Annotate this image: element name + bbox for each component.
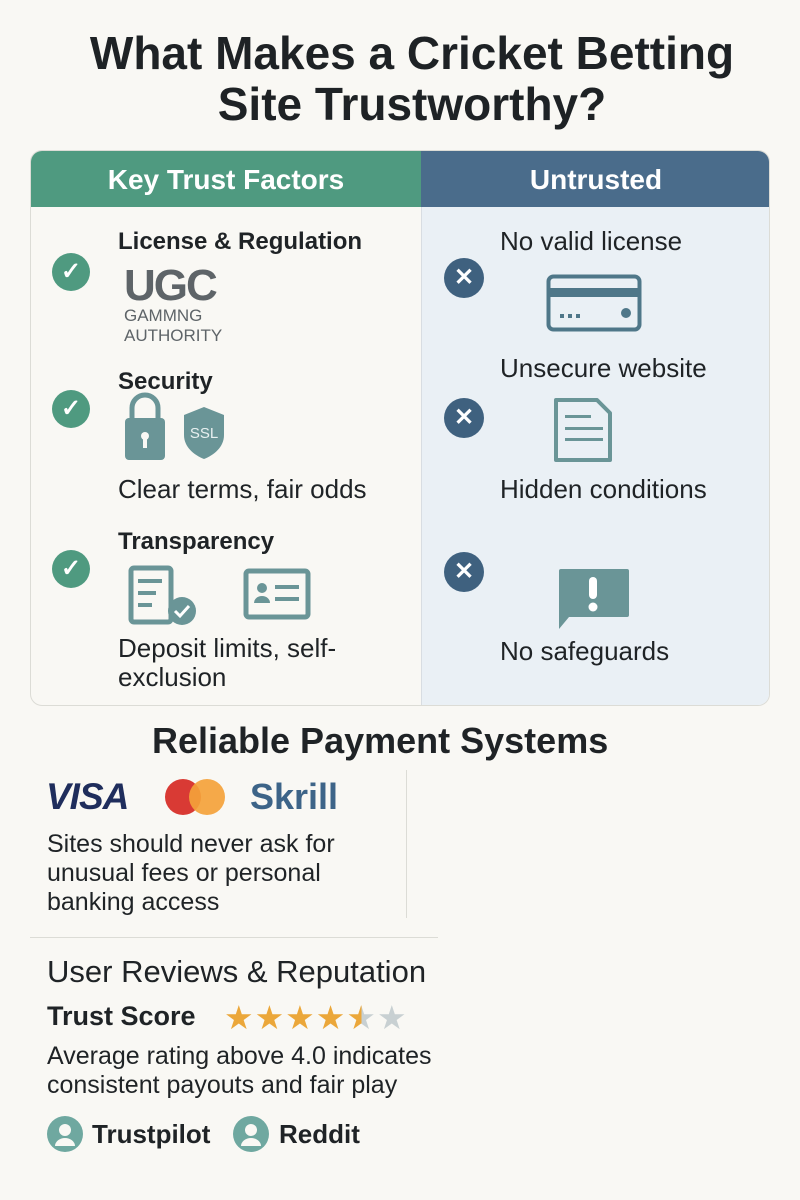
icon: document <box>554 398 612 462</box>
badge: trustpilot: Trustpilot <box>92 1119 210 1149</box>
header: key trust factors: Key Trust Factors <box>108 164 344 195</box>
logo: mastercard <box>165 779 225 815</box>
text: payment note: Sites should never ask for <box>47 830 335 858</box>
badge: trustpilot <box>47 1116 210 1152</box>
divider vertical <box>406 770 407 918</box>
text: rating note: consistent payouts and fair play <box>47 1071 397 1099</box>
icon: x 2 <box>444 398 484 438</box>
label: trust score: Trust Score <box>47 1001 196 1031</box>
icon: x 2: ✕ <box>454 404 474 431</box>
text: clear terms: Clear terms, fair odds <box>118 474 367 504</box>
icon: x 1 <box>444 258 484 298</box>
logo: UGC gaming authority <box>124 261 222 345</box>
text: no safeguards: No safeguards <box>500 636 669 666</box>
text: no valid license: No valid license <box>500 226 682 256</box>
title: Site Trustworthy? <box>218 78 606 130</box>
icon: x 3: ✕ <box>454 558 474 585</box>
text: deposit limits: exclusion <box>118 662 226 692</box>
payment logos <box>46 776 338 817</box>
icon: check 3: ✓ <box>61 555 81 582</box>
logo: UGC gaming authority: GAMMNG <box>124 306 202 325</box>
text: payment note: unusual fees or personal <box>47 859 321 887</box>
header: key trust factors <box>31 151 421 207</box>
logo: visa: VISA <box>46 776 128 817</box>
text: rating note <box>47 1042 432 1099</box>
heading: transparency: Transparency <box>118 528 274 555</box>
badge: reddit: Reddit <box>279 1119 360 1149</box>
heading: reliable payment systems: Reliable Payment Systems <box>152 720 608 761</box>
icon: alert bubble <box>559 569 629 629</box>
title <box>90 27 734 130</box>
text: rating note: Average rating above 4.0 indicates <box>47 1042 432 1070</box>
text: deposit limits <box>118 633 336 692</box>
logo: skrill: Skrill <box>250 776 338 817</box>
icon: id card <box>244 568 310 620</box>
heading: license: License & Regulation <box>118 228 362 255</box>
text: unsecure website: Unsecure website <box>500 353 707 383</box>
icon: x 3 <box>444 552 484 592</box>
text: deposit limits: Deposit limits, self- <box>118 633 336 663</box>
panel: comparison <box>30 150 770 706</box>
divider <box>30 937 438 938</box>
icon: credit card <box>546 274 642 332</box>
icon: check 1: ✓ <box>61 258 81 285</box>
icon: SSL shield <box>184 407 224 459</box>
icon: check 2 <box>52 390 90 428</box>
header: untrusted: Untrusted <box>530 164 662 195</box>
trust score row <box>47 999 408 1036</box>
icon: check 1 <box>52 253 90 291</box>
logo: UGC gaming authority: UGC <box>124 261 216 310</box>
stars: ★★★★★★ <box>224 999 408 1036</box>
icon: check 3 <box>52 550 90 588</box>
logo: UGC gaming authority: AUTHORITY <box>124 326 222 345</box>
badge: reddit <box>233 1116 360 1152</box>
text: payment note <box>47 830 335 916</box>
icon: document check <box>128 566 196 625</box>
icon: lock <box>125 392 165 460</box>
right column background <box>421 207 771 707</box>
text: hidden conditions: Hidden conditions <box>500 474 707 504</box>
title: What Makes a Cricket Betting <box>90 27 734 79</box>
heading: user reviews: User Reviews & Reputation <box>47 954 426 989</box>
header: untrusted <box>421 151 771 207</box>
icon: SSL shield: SSL <box>190 425 218 442</box>
heading: security: Security <box>118 368 213 395</box>
icon: x 1: ✕ <box>454 264 474 291</box>
text: payment note: banking access <box>47 888 219 916</box>
icon: check 2: ✓ <box>61 395 81 422</box>
